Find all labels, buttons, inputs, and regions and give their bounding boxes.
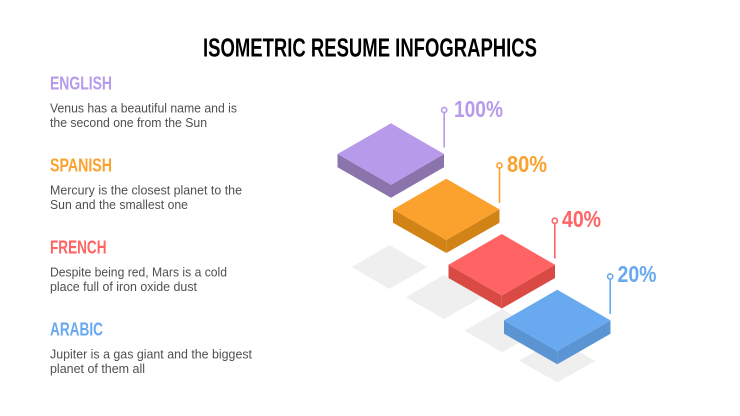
text block: english description: the second one from the Sun: [50, 116, 207, 130]
label: 100%: 100%: [454, 96, 503, 122]
block: english 100%: [338, 123, 444, 198]
text block: english description: Venus has a beautiful name and is: [50, 102, 237, 116]
block: french 40%: [448, 234, 555, 308]
text block: arabic description: [50, 348, 253, 376]
pin: 80%: [497, 163, 502, 203]
label: 40%: 40%: [562, 206, 601, 232]
label: 80%: 80%: [507, 151, 547, 177]
panel: spanish text: [50, 154, 242, 212]
pin: 40%: [552, 218, 557, 258]
heading: spanish: SPANISH: [50, 154, 112, 175]
text block: arabic description: planet of them all: [50, 362, 145, 376]
text block: spanish description: [50, 184, 242, 212]
panel: french text: [50, 236, 227, 294]
label: 20%: 20%: [618, 261, 656, 287]
heading: french: FRENCH: [50, 236, 106, 257]
floor shadows: [352, 245, 595, 382]
block: spanish 80%: [393, 179, 500, 253]
panel: english text: [50, 72, 237, 130]
pin: 20%: [608, 274, 613, 314]
pin: 100%: [442, 107, 447, 148]
text block: french description: place full of iron oxide dust: [50, 280, 198, 294]
heading: english: ENGLISH: [50, 72, 112, 93]
text block: arabic description: Jupiter is a gas giant and the biggest: [50, 348, 253, 362]
text block: english description: [50, 102, 237, 130]
panel: arabic text: [50, 319, 253, 376]
text block: french description: [50, 266, 227, 294]
block: arabic 20%: [504, 290, 610, 364]
heading: arabic: ARABIC: [50, 319, 103, 340]
text block: french description: Despite being red, Mars is a cold: [50, 266, 227, 280]
text block: spanish description: Sun and the smallest one: [50, 198, 188, 212]
text block: spanish description: Mercury is the closest planet to the: [50, 184, 242, 198]
title: ISOMETRIC RESUME INFOGRAPHICS: [203, 33, 537, 63]
